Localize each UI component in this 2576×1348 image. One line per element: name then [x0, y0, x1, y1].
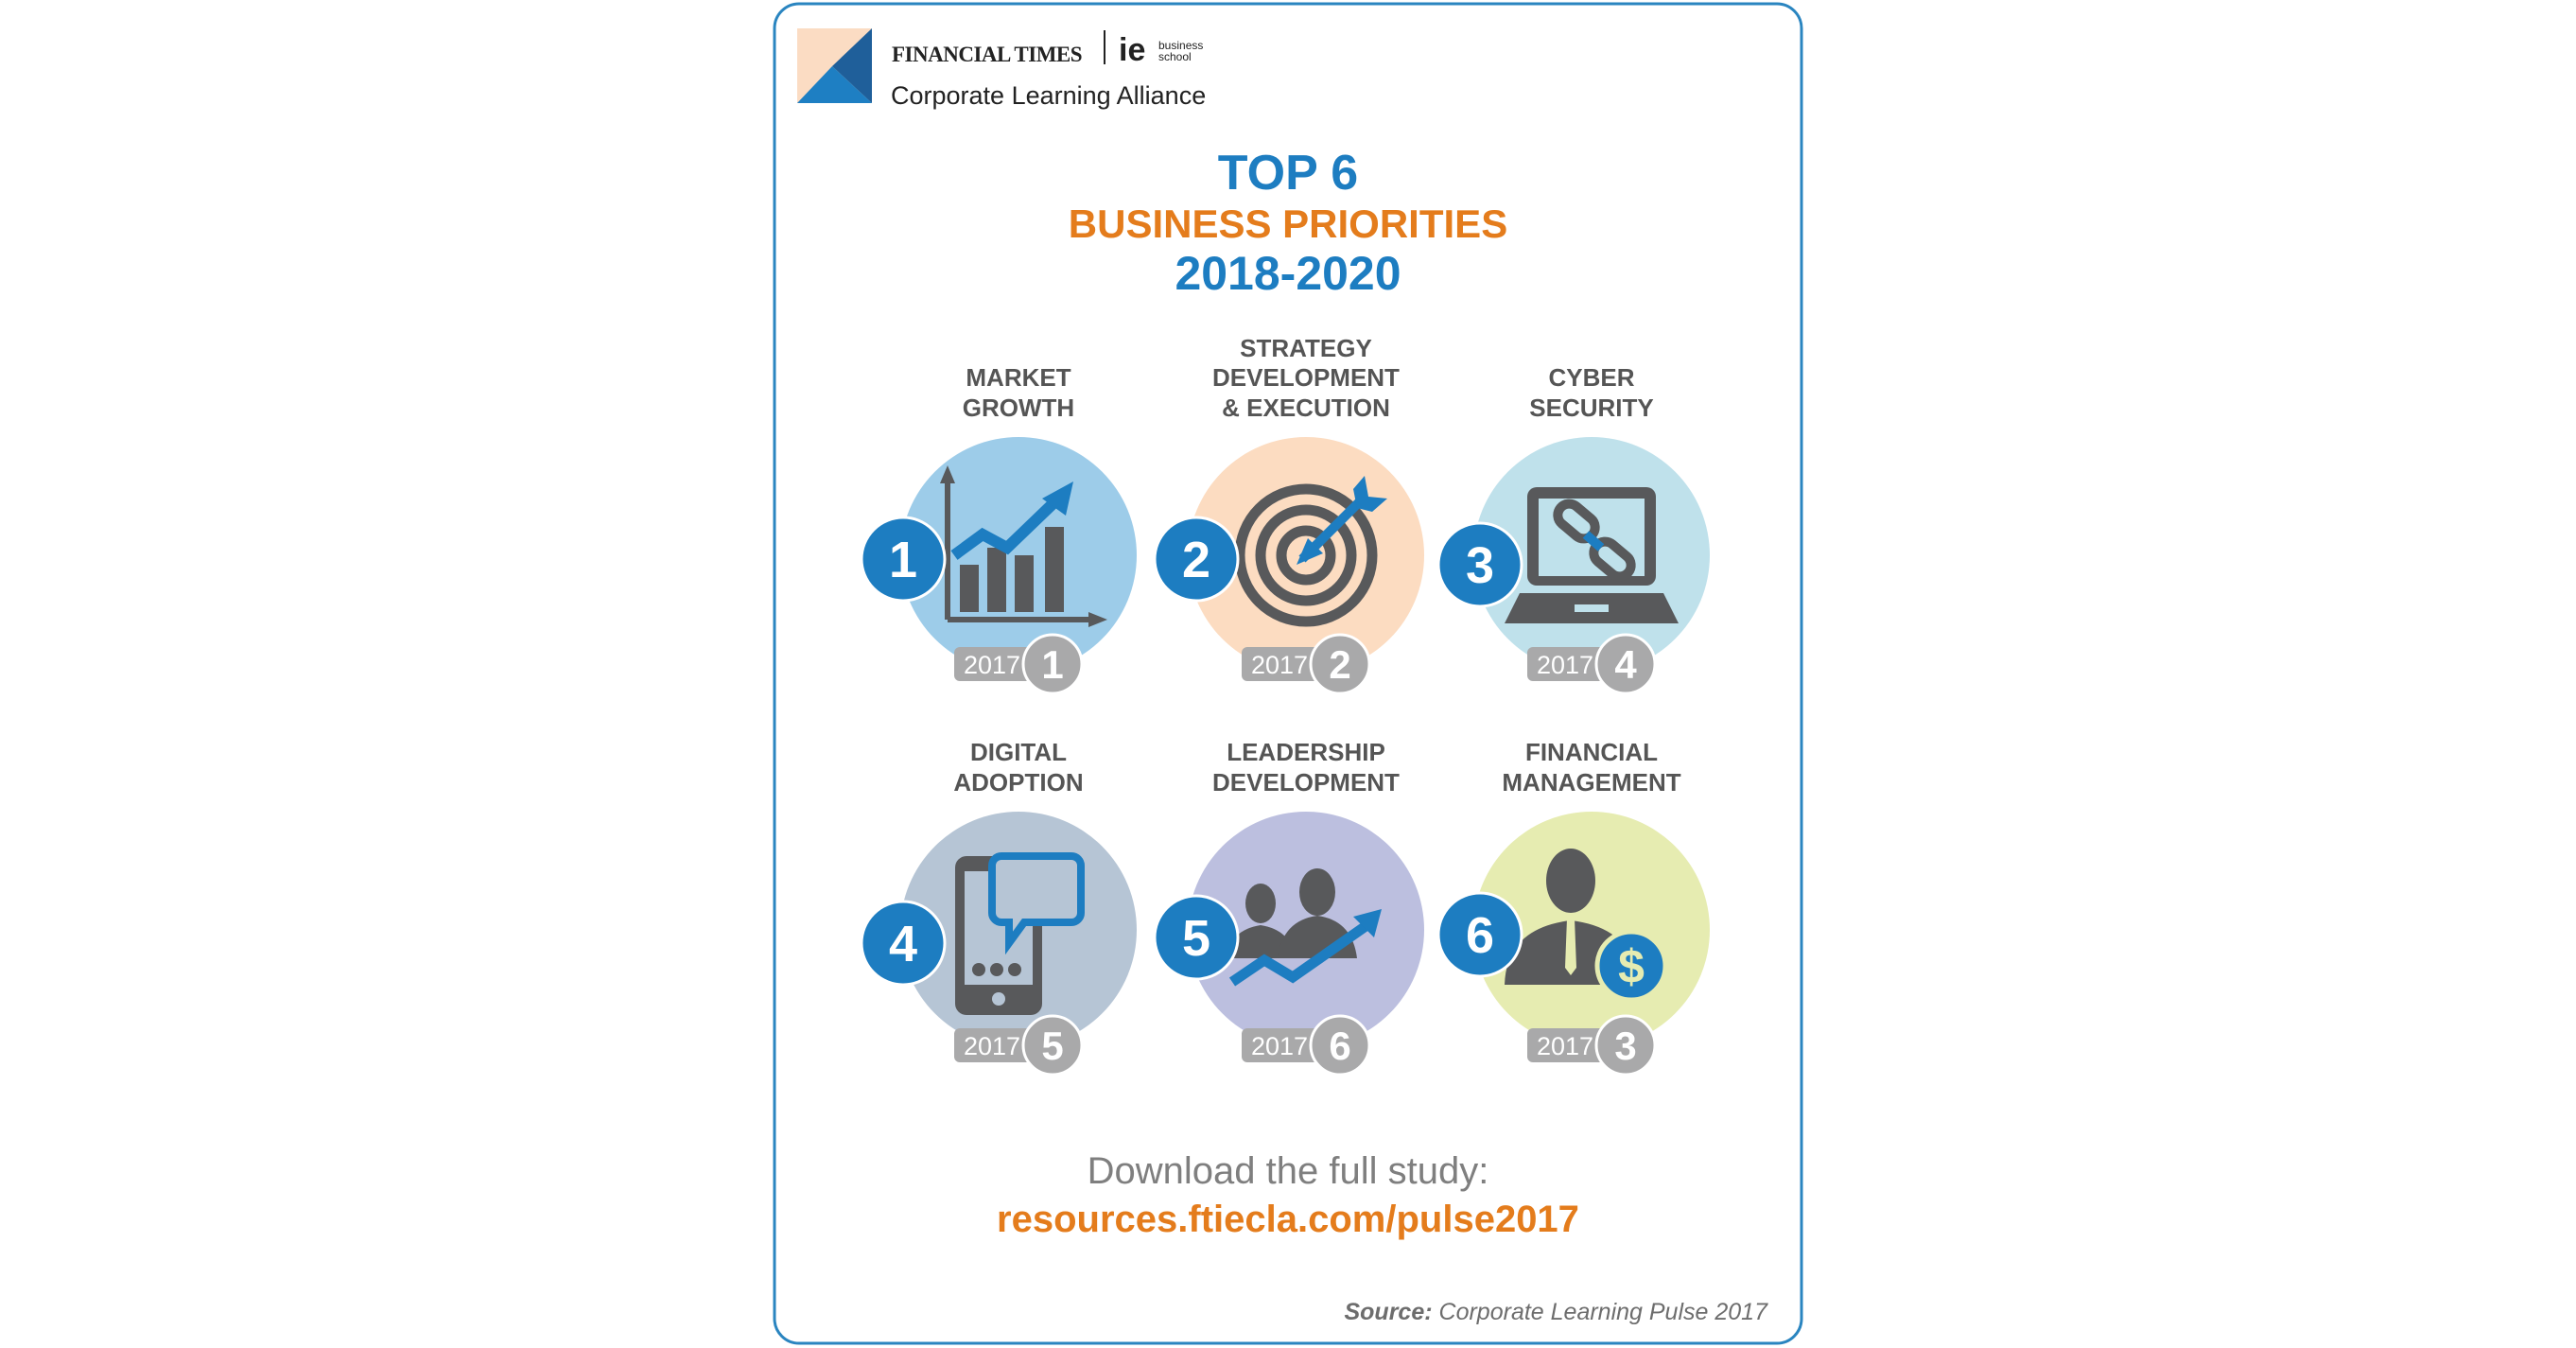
2017 badges: 6: [1329, 1024, 1351, 1068]
logo: FINANCIAL TIMES: [892, 43, 1082, 66]
download text: Download the full study:: [1088, 1150, 1488, 1192]
labels row 2: FINANCIAL: [1525, 738, 1658, 766]
labels row 2: LEADERSHIP: [1227, 738, 1385, 766]
2017 badges: 5: [1041, 1024, 1064, 1068]
title: [1069, 146, 1507, 300]
rank badges: 3: [1466, 537, 1494, 594]
2017 badges: 2017: [1251, 651, 1308, 679]
2017 badges: 2017: [1537, 651, 1593, 679]
download text: [997, 1150, 1579, 1240]
2017 badges: 2017: [1251, 1032, 1308, 1060]
title: 2018-2020: [1175, 247, 1401, 300]
title: TOP 6: [1218, 146, 1358, 201]
item 6: financial: $: [1618, 940, 1645, 993]
item 6: financial: [1473, 812, 1710, 1048]
rank badges: 6: [1466, 907, 1494, 964]
logo: [797, 28, 1206, 110]
labels row 1: DEVELOPMENT: [1212, 363, 1400, 392]
rank badges: 4: [889, 916, 917, 972]
item 2: target: [1188, 437, 1424, 674]
title: BUSINESS PRIORITIES: [1069, 201, 1507, 246]
labels row 1: [963, 334, 1654, 422]
rank badges: 5: [1182, 910, 1210, 967]
source: Source: Corporate Learning Pulse 2017: [1344, 1299, 1768, 1325]
rank badges: [862, 517, 1522, 985]
logo: business: [1158, 39, 1203, 52]
logo: school: [1158, 50, 1192, 63]
card frame: [775, 4, 1801, 1343]
2017 badges: 2017: [964, 1032, 1020, 1060]
labels row 2: MANAGEMENT: [1502, 768, 1681, 797]
download text: resources.ftiecla.com/pulse2017: [997, 1199, 1579, 1240]
labels row 1: MARKET: [966, 363, 1071, 392]
labels row 2: DIGITAL: [970, 738, 1067, 766]
labels row 1: & EXECUTION: [1222, 394, 1390, 422]
2017 badges: 1: [1041, 642, 1064, 687]
item 3: laptop: [1473, 437, 1710, 674]
2017 badges: 2017: [964, 651, 1020, 679]
2017 badges: [954, 635, 1655, 1075]
labels row 2: DEVELOPMENT: [1212, 768, 1400, 797]
2017 badges: 3: [1614, 1024, 1637, 1068]
item 1: market growth: [900, 437, 1137, 674]
labels row 1: GROWTH: [963, 394, 1074, 422]
labels row 1: CYBER: [1548, 363, 1635, 392]
logo: Corporate Learning Alliance: [891, 81, 1206, 110]
logo: ie: [1119, 32, 1145, 68]
labels row 1: SECURITY: [1529, 394, 1654, 422]
item 4: phone: [900, 812, 1137, 1048]
labels row 2: [953, 738, 1681, 797]
2017 badges: 2: [1329, 642, 1351, 687]
2017 badges: 2017: [1537, 1032, 1593, 1060]
rank badges: 2: [1182, 532, 1210, 588]
item 5: leadership: [1188, 812, 1424, 1048]
labels row 1: STRATEGY: [1240, 334, 1372, 362]
2017 badges: 4: [1614, 642, 1637, 687]
labels row 2: ADOPTION: [953, 768, 1084, 797]
rank badges: 1: [889, 532, 917, 588]
